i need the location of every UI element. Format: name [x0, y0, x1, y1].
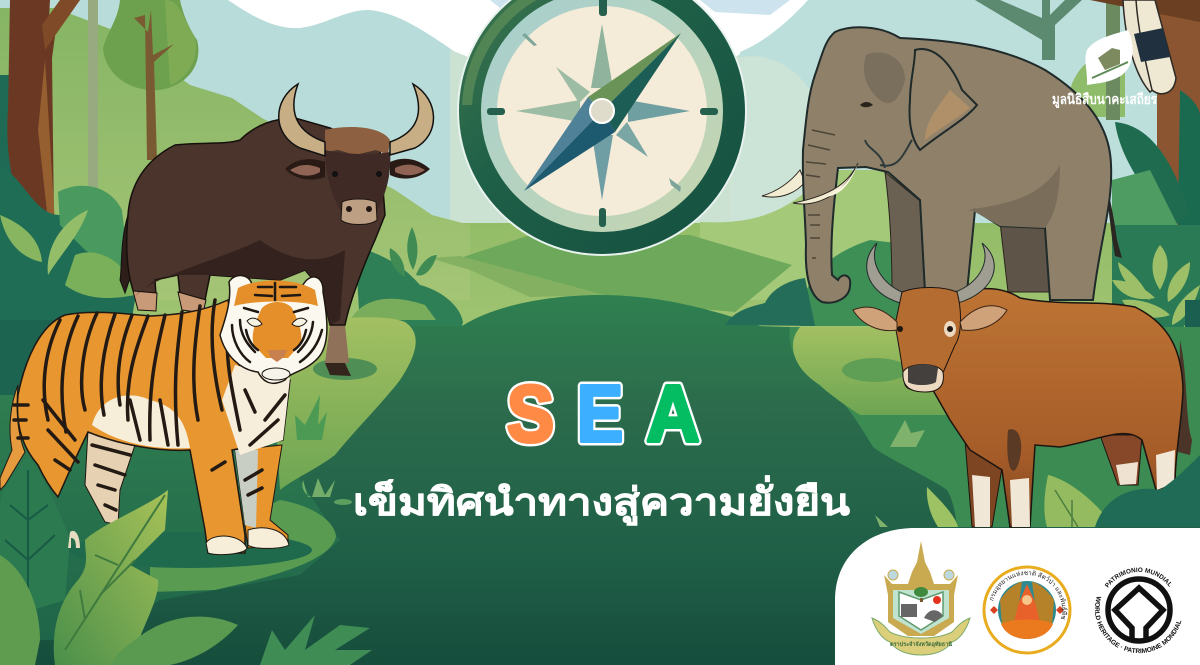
tiger tail: [0, 385, 25, 490]
letter A: A: [646, 369, 700, 458]
foundation name: มูลนิธิสืบนาคะเสถียร: [1052, 91, 1157, 108]
letter A: A: [646, 369, 700, 458]
animal: gaur: [120, 84, 434, 376]
letter S: S: [507, 369, 554, 458]
logo: department seal: [982, 566, 1072, 654]
logo: world heritage: WORLD HERITAGE · PATRIMOINE MONDIAL: [1095, 596, 1182, 654]
foreground leaves right: [875, 455, 1200, 527]
left forest trees: [0, 0, 463, 395]
logo: world heritage: [1095, 568, 1182, 654]
tiger far legs: [85, 430, 135, 525]
foundation logo: [1052, 30, 1157, 108]
subtitle: เข็มทิศนำทางสู่ความยั่งยืน: [353, 475, 850, 526]
logo panel: [835, 528, 1200, 665]
logo: crest: ตราประจำจังหวัดอุทัยธานี: [890, 640, 952, 648]
letter E: E: [577, 369, 623, 458]
right forest trees: [725, 0, 1200, 395]
compass needle: [588, 33, 681, 111]
tiger head: [220, 276, 327, 383]
animal: banteng: [853, 243, 1192, 527]
letter E: E: [577, 369, 623, 458]
logo: crest: [872, 541, 970, 655]
compass ticks: [487, 0, 718, 227]
tiger body: [17, 300, 290, 553]
hornbill tail feathers: [1123, 0, 1176, 94]
foreground leaves left: [0, 395, 372, 665]
left and right lawns: [0, 317, 1200, 640]
heading: SEA: [507, 369, 700, 458]
logo: department seal: กรมอุทยานแห่งชาติ สัตว์ป่า และพันธุ์พืช: [990, 570, 1068, 620]
animal: tiger: [0, 276, 327, 555]
animal: elephant: [762, 27, 1122, 303]
compass star: [591, 24, 613, 88]
letter S: S: [507, 369, 554, 458]
logo: world heritage: PATRIMONIO MUNDIAL: [1104, 568, 1172, 588]
compass: [457, 0, 747, 256]
tiger paws: [206, 536, 247, 555]
